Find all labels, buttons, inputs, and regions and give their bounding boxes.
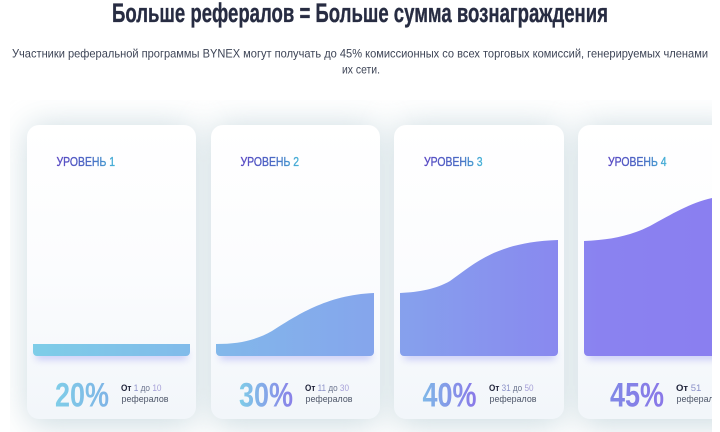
level 3 referral range: [489, 383, 536, 405]
level 3 heading: УРОВЕНЬ 3: [424, 154, 482, 169]
card 3 background: [394, 125, 564, 419]
level 4 chart: [584, 198, 720, 359]
card 1 background: [27, 125, 196, 419]
level 2 referral range: рефералов: [306, 394, 352, 405]
level 4 heading: УРОВЕНЬ 4: [608, 154, 666, 169]
level 2 referral range: От 11 до 30: [305, 383, 349, 394]
panel: level 3: [394, 125, 564, 419]
panel: level 1: [27, 125, 196, 419]
card 4 background: [578, 125, 720, 419]
level 1 referral range: [121, 383, 168, 405]
level 3 referral range: От 31 до 50: [489, 383, 534, 394]
level 2 percentage: 30%: [239, 376, 293, 414]
level 1 heading: УРОВЕНЬ 1: [56, 154, 115, 169]
level 2 chart: [216, 293, 374, 359]
level 2 heading: УРОВЕНЬ 2: [240, 154, 299, 169]
level 3 referral range: рефералов: [490, 394, 536, 405]
card 2 background: [211, 125, 380, 419]
intro text: [12, 46, 708, 76]
intro text: их сети.: [342, 62, 380, 76]
level 4 percentage: 45%: [610, 376, 664, 414]
panel: level 2: [211, 125, 380, 419]
card shadows background: [27, 125, 720, 425]
level 1 referral range: рефералов: [122, 394, 168, 405]
level 4 referral range: [676, 384, 712, 404]
level 4 referral range: От 51: [676, 383, 701, 394]
level 3 chart: [400, 240, 558, 359]
level 2 referral range: [305, 383, 352, 405]
level 1 referral range: От 1 до 10: [121, 383, 162, 394]
level 3 percentage: 40%: [422, 376, 476, 414]
level 1 chart: [33, 344, 190, 359]
level 1 percentage: 20%: [55, 376, 109, 414]
panel: level 4: [578, 125, 720, 419]
